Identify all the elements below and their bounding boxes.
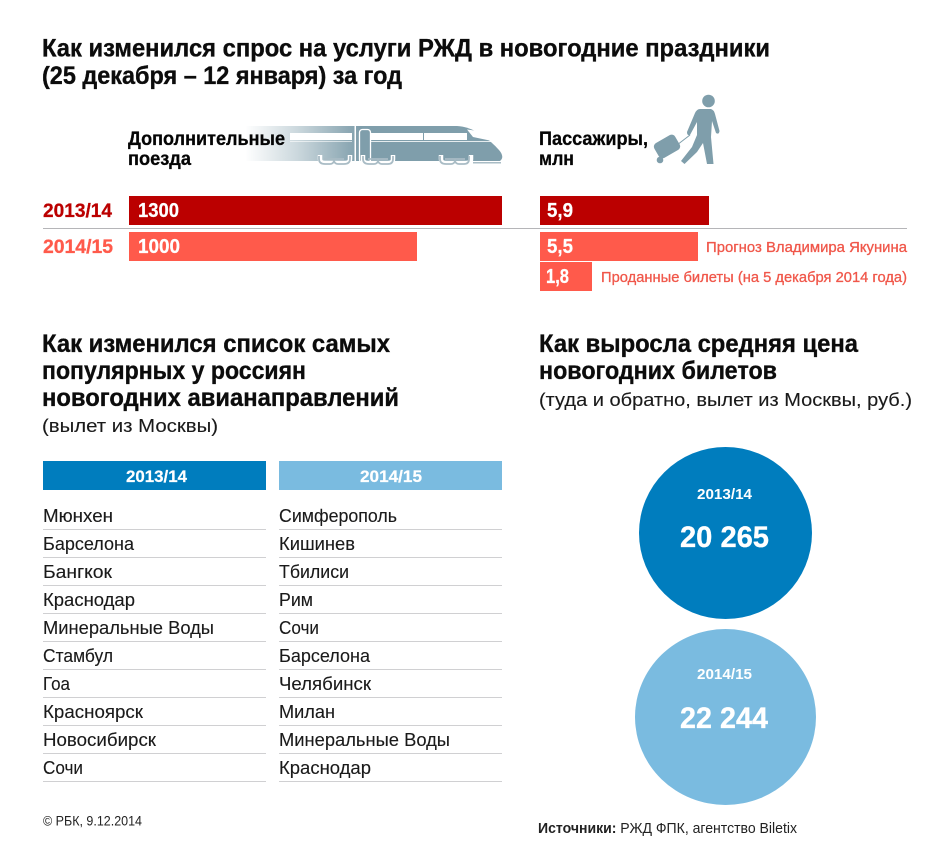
table: 2013/14 destinations: Новосибирск bbox=[43, 729, 157, 750]
table: 2013/14 destinations: Краснодар bbox=[43, 589, 135, 610]
bar: passengers 2013/14: 5,9 bbox=[547, 200, 573, 222]
table header: 2014/15 bbox=[279, 461, 502, 490]
circle: price 2013/14 bbox=[639, 447, 812, 619]
heading: additional trains: Дополнительные bbox=[128, 129, 285, 150]
note: tickets sold: Проданные билеты (на 5 декабря 2014 года) bbox=[601, 270, 907, 286]
table: 2014/15 destinations: Минеральные Воды bbox=[279, 729, 450, 750]
bar: trains 2014/15: 1000 bbox=[138, 236, 180, 258]
credit: © РБК, 9.12.2014 bbox=[43, 812, 142, 828]
table: 2014/15 destinations: Милан bbox=[279, 701, 335, 722]
bar: passengers forecast 2014/15 bbox=[540, 232, 698, 261]
heading: ticket price: (туда и обратно, вылет из Москвы, руб.) bbox=[539, 389, 912, 410]
heading: destinations: Как изменился список самых bbox=[42, 330, 390, 358]
heading: destinations: новогодних авианаправлений bbox=[42, 384, 399, 412]
table: 2014/15 destinations: Сочи bbox=[279, 617, 319, 638]
table: 2013/14 destinations: Минеральные Воды bbox=[43, 617, 214, 638]
heading: ticket price bbox=[539, 330, 912, 410]
circle: price 2014/15: 22 244 bbox=[680, 702, 768, 735]
bar: passengers 2013/14 bbox=[540, 196, 709, 225]
table: 2014/15 destinations: Краснодар bbox=[279, 757, 371, 778]
table: 2014/15 destinations bbox=[279, 461, 502, 782]
row label: 2013/14: 2013/14 bbox=[43, 200, 112, 222]
row label: 2014/15: 2014/15 bbox=[43, 236, 113, 258]
heading: passengers: млн bbox=[539, 149, 574, 170]
title bbox=[42, 34, 770, 90]
icon: train bbox=[245, 125, 502, 164]
sources: Источники: РЖД ФПК, агентство Biletix bbox=[538, 820, 797, 837]
circle: price 2013/14: 20 265 bbox=[680, 521, 769, 554]
heading: additional trains: поезда bbox=[128, 149, 191, 170]
bar: tickets sold: 1,8 bbox=[546, 266, 569, 288]
bar: trains 2013/14 bbox=[129, 196, 502, 225]
heading: ticket price: новогодних билетов bbox=[539, 357, 777, 385]
table: 2014/15 destinations: Рим bbox=[279, 589, 313, 610]
table header: 2013/14: 2013/14 bbox=[126, 467, 188, 486]
heading: passengers bbox=[539, 129, 648, 170]
note: forecast: Прогноз Владимира Якунина bbox=[706, 240, 908, 256]
table: 2013/14 destinations bbox=[43, 461, 266, 782]
table: 2014/15 destinations: Тбилиси bbox=[279, 561, 349, 582]
heading: destinations: популярных у россиян bbox=[42, 357, 306, 385]
table: 2013/14 destinations: Стамбул bbox=[43, 645, 113, 666]
table: 2013/14 destinations: Красноярск bbox=[43, 701, 144, 722]
bar: trains 2013/14: 1300 bbox=[138, 200, 179, 222]
heading: destinations: (вылет из Москвы) bbox=[42, 415, 218, 436]
bar: trains 2014/15 bbox=[129, 232, 417, 261]
table header: 2014/15: 2014/15 bbox=[360, 467, 422, 486]
table: 2013/14 destinations: Гоа bbox=[43, 673, 71, 694]
circle: price 2013/14: 2013/14 bbox=[697, 486, 753, 503]
table: 2013/14 destinations: Сочи bbox=[43, 757, 83, 778]
circle: price 2014/15: 2014/15 bbox=[697, 666, 752, 683]
table: 2014/15 destinations: Кишинев bbox=[279, 533, 355, 554]
table: 2014/15 destinations: Барселона bbox=[279, 645, 371, 666]
icon: passenger with suitcase bbox=[652, 95, 720, 164]
table: 2013/14 destinations: Бангкок bbox=[43, 561, 113, 582]
title: Как изменился спрос на услуги РЖД в новогодние праздники bbox=[42, 34, 770, 62]
title: (25 декабря – 12 января) за год bbox=[42, 62, 402, 90]
table: 2014/15 destinations: Симферополь bbox=[279, 505, 397, 526]
bar: passengers forecast 2014/15: 5,5 bbox=[547, 236, 573, 258]
table: 2013/14 destinations: Мюнхен bbox=[43, 505, 113, 526]
table: 2013/14 destinations: Барселона bbox=[43, 533, 135, 554]
heading: additional trains bbox=[128, 129, 285, 170]
heading: ticket price: Как выросла средняя цена bbox=[539, 330, 859, 358]
circle: price 2014/15 bbox=[635, 629, 816, 805]
table header: 2013/14 bbox=[43, 461, 266, 490]
heading: destinations bbox=[42, 330, 399, 436]
bar: tickets sold bbox=[540, 262, 592, 291]
heading: passengers: Пассажиры, bbox=[539, 129, 648, 150]
table: 2014/15 destinations: Челябинск bbox=[279, 673, 372, 694]
